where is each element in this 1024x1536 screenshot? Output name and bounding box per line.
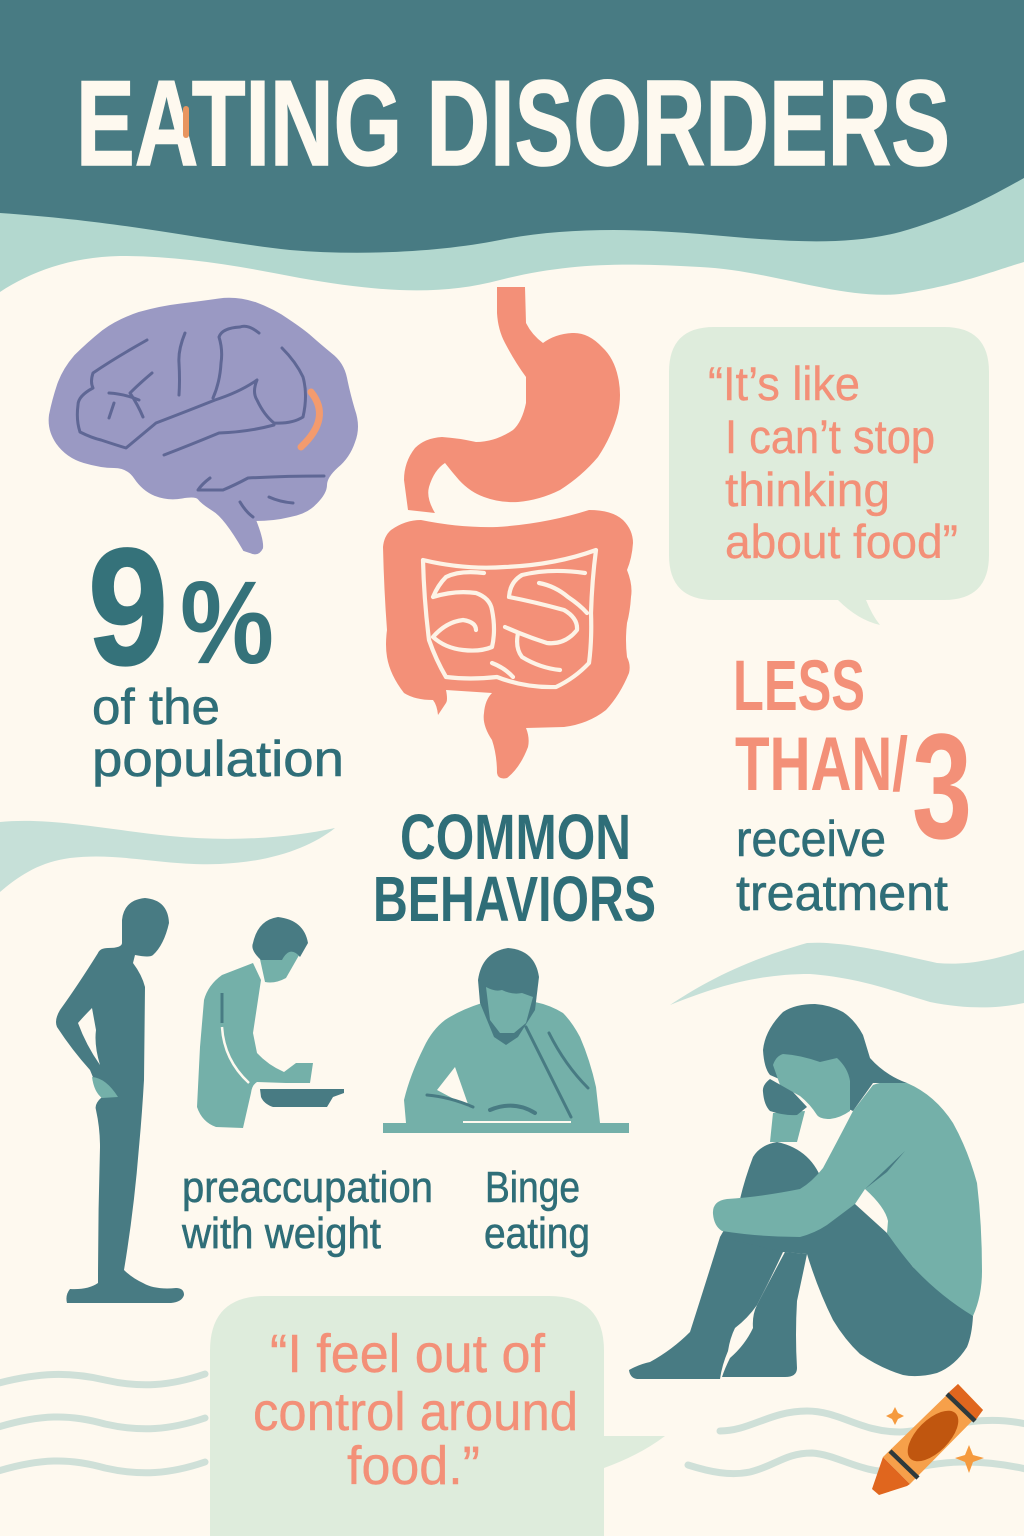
stat label: receive treatment: treatment bbox=[736, 865, 948, 921]
icon: crayon bbox=[872, 1384, 984, 1495]
quote bubble: out of control: “I feel out of bbox=[270, 1324, 546, 1384]
header banner bbox=[0, 0, 1024, 253]
quote bubble: out of control: food.” bbox=[347, 1436, 480, 1496]
sitting person's hand bbox=[763, 1079, 807, 1115]
label: binge eating: Binge bbox=[485, 1163, 580, 1212]
stat label: receive treatment bbox=[736, 811, 948, 921]
stat: less than 1/3: LESS bbox=[733, 647, 865, 726]
icon: intestines bbox=[383, 510, 633, 778]
icon: brain bbox=[50, 299, 357, 553]
orange accent on title letter bbox=[183, 106, 189, 138]
bowl bbox=[260, 1089, 344, 1107]
sitting person's legs bbox=[629, 1142, 973, 1379]
stat label: receive treatment: receive bbox=[736, 811, 886, 867]
mint wave left bbox=[0, 821, 335, 892]
thin waves bottom bbox=[0, 1374, 1024, 1474]
stat: less than 1/3 bbox=[733, 647, 972, 870]
stat: 9%: 9 bbox=[88, 515, 168, 700]
stat label: of the population: population bbox=[92, 731, 344, 787]
heading: common behaviors: COMMON bbox=[400, 801, 631, 873]
table bbox=[383, 1123, 629, 1133]
standing person's hand bbox=[92, 1077, 118, 1098]
heading: common behaviors bbox=[373, 801, 656, 935]
label: binge eating bbox=[484, 1163, 590, 1258]
label: preoccupation with weight: with weight bbox=[181, 1209, 381, 1258]
quote bubble: can't stop thinking bbox=[669, 327, 989, 625]
icon: stomach bbox=[404, 287, 620, 513]
quote bubble: out of control: control around bbox=[253, 1382, 578, 1442]
stat: 9% bbox=[88, 515, 274, 700]
figure: sitting person hugging knees bbox=[629, 1004, 982, 1379]
label: preoccupation with weight: preaccupation bbox=[182, 1163, 433, 1212]
stat: 9%: % bbox=[180, 557, 274, 689]
quote bubble: can't stop thinking: I can’t stop bbox=[725, 410, 935, 463]
sitting person's face bbox=[773, 1054, 850, 1119]
figure: person eating at table bbox=[383, 948, 629, 1133]
figure: person bent over bowl bbox=[197, 917, 344, 1128]
sitting person's hair bbox=[763, 1004, 907, 1111]
stat: less than 1/3: THAN/ bbox=[735, 722, 908, 807]
stat: less than 1/3: 3 bbox=[912, 702, 972, 870]
stat label: of the population bbox=[92, 679, 344, 787]
mint wave under header bbox=[0, 150, 1024, 295]
quote bubble: can't stop thinking: “It’s like bbox=[708, 357, 860, 410]
heading: common behaviors: BEHAVIORS bbox=[373, 863, 656, 935]
brain highlight arc bbox=[301, 392, 319, 447]
label: preoccupation with weight bbox=[181, 1163, 433, 1258]
label: binge eating: eating bbox=[484, 1209, 590, 1258]
sitting person's wrist bbox=[770, 1111, 805, 1142]
stat label: of the population: of the bbox=[92, 679, 220, 735]
quote bubble: can't stop thinking: thinking bbox=[725, 463, 890, 516]
mint wave right bbox=[670, 943, 1024, 1007]
figure: standing person bbox=[56, 898, 184, 1303]
quote bubble: out of control bbox=[210, 1296, 665, 1536]
quote bubble: can't stop thinking: about food” bbox=[725, 515, 958, 568]
sparkles bbox=[886, 1407, 904, 1425]
